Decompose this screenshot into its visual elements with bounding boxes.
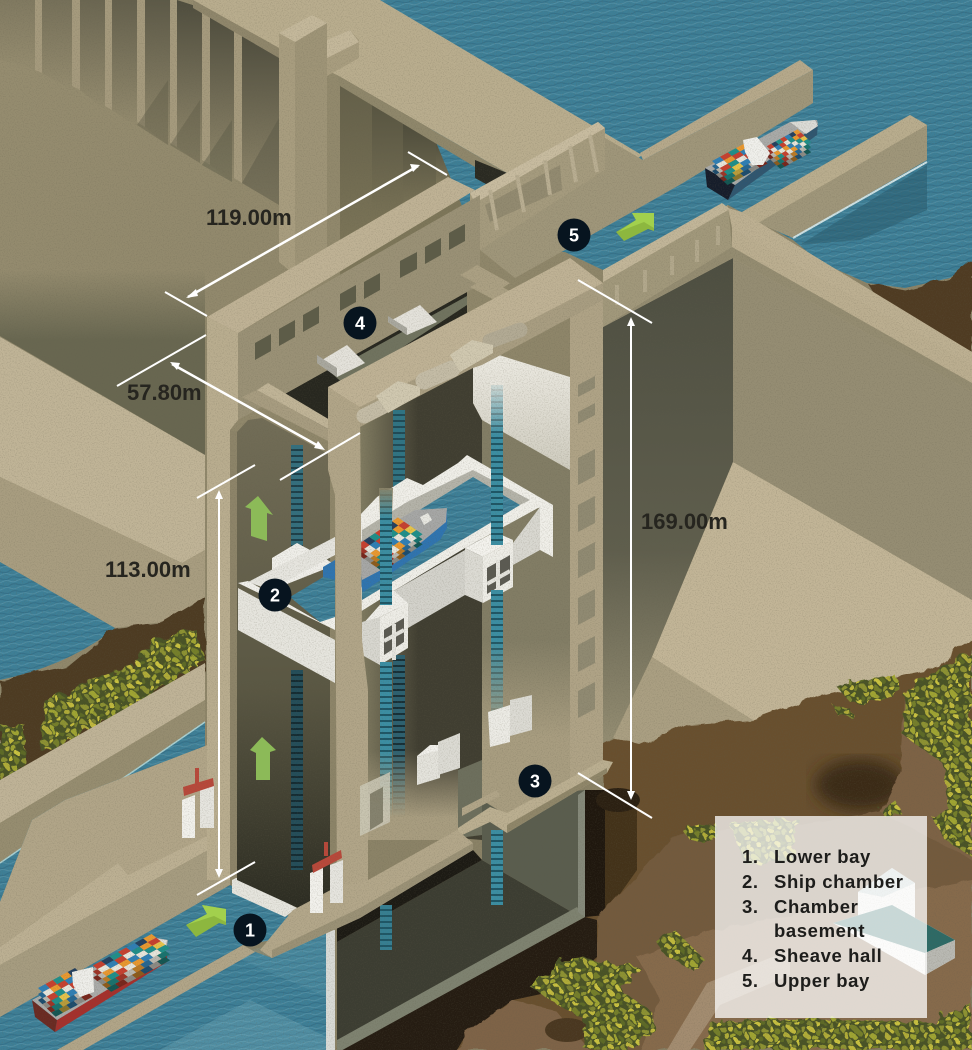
lifting screw: front right upper [491,385,503,545]
sheave blocks: grey [317,305,437,377]
small beams behind the front tower [460,265,515,303]
building: white hall with teal roof [833,868,955,975]
legend: Chamber [774,896,858,917]
red gates: lower bay [182,768,343,913]
counterweights [417,695,532,785]
canal walls: left side channel [0,663,235,1017]
legend: 4. [742,945,759,966]
lifting screw: rear left lower [291,670,303,870]
water: left lake [0,562,115,680]
marker 1: 1 [245,920,255,940]
marker 3 [518,764,552,798]
legend: 2. [742,871,759,892]
truss bridge: upper deck [470,122,605,250]
lifting screw: below basement [386,830,497,950]
legend [715,816,927,1018]
legend: basement [774,920,865,941]
earth: upper right bank [867,260,972,356]
ship: red container ship [32,934,170,1032]
back tower: crown with windows [207,177,480,880]
lifting screw: front right lower [491,590,503,790]
water: upper reservoir and channel [378,0,972,288]
legend: 3. [742,896,759,917]
lower-left dam slab [0,337,205,628]
flow arrow: up lower [250,737,276,780]
lifting screw: front left lower [380,662,392,830]
legend: Ship chamber [774,871,904,892]
earth: right slope [337,640,972,1050]
legend: 1. [742,846,759,867]
screw fades at top [379,380,504,518]
dimension: 57.80m: 57.80m [127,380,202,405]
bushes: right slope [528,650,972,1050]
ship chamber: left half [238,537,335,683]
ship chamber: right half [360,455,553,628]
guide wall: lower channel strip [57,945,255,1050]
chamber basement slab [458,760,613,837]
dimension: 57.80m [117,335,360,480]
marker 4 [344,306,376,340]
lower gate: white bay door [232,877,335,1050]
legend: Sheave hall [774,945,882,966]
dam top deck [193,0,642,190]
pillar: dam buttress [279,15,359,275]
earth and bushes: left bank [0,597,205,790]
back tower: interior shaft [237,292,467,908]
legend: Lower bay [774,846,871,867]
marker 1 [234,914,266,946]
front tower: top crown and beam [328,258,603,427]
marker 2 [258,578,292,612]
guide wall: upper north [480,60,813,278]
front tower: left pillar [328,387,368,895]
flow arrow: lower bay [186,905,226,937]
dimension: 169.00m: 169.00m [641,509,728,534]
dimension: 169.00m [578,280,728,818]
marker 4: 4 [355,314,365,334]
marker 5: 5 [569,226,579,246]
crossbeam: tan girder [242,383,330,442]
guide wall: upper south [742,115,927,245]
pit: chamber foundation [337,790,585,1050]
dimension: 119.00m: 119.00m [206,205,292,230]
dimension: 113.00m: 113.00m [105,557,191,582]
legend: Upper bay [774,970,870,991]
marker 3: 3 [530,772,540,792]
marker 2: 2 [270,586,280,606]
dimension: 119.00m [165,152,447,316]
ship: navy container ship [705,120,818,200]
front tower: lower wall fade [368,640,570,840]
front tower: interior walls [360,347,570,840]
apex of right dam [728,208,972,365]
lifting screw: front left upper [380,490,392,605]
flow arrow: upper bay [616,213,654,241]
lifting screw: rear left upper [291,445,303,552]
hoist cutout: translucent frame [360,772,390,836]
lifting screws: rear middle [393,410,405,830]
ship: blue container ship in chamber [358,508,447,592]
legend: 5. [742,970,759,991]
chamber blocks: yoke guides [362,532,513,665]
base slab: bridge deck [260,830,473,958]
truss bridge: upper bay [603,203,732,327]
right dam: upper ridge and faces [603,210,972,750]
marker 5 [558,218,590,252]
dimension: 113.00m [105,465,255,895]
water: lower channel [0,885,333,1050]
pulleys and yokes [364,330,520,416]
front tower: right pillar with windows [570,283,603,785]
flow arrow: up upper [245,496,273,541]
